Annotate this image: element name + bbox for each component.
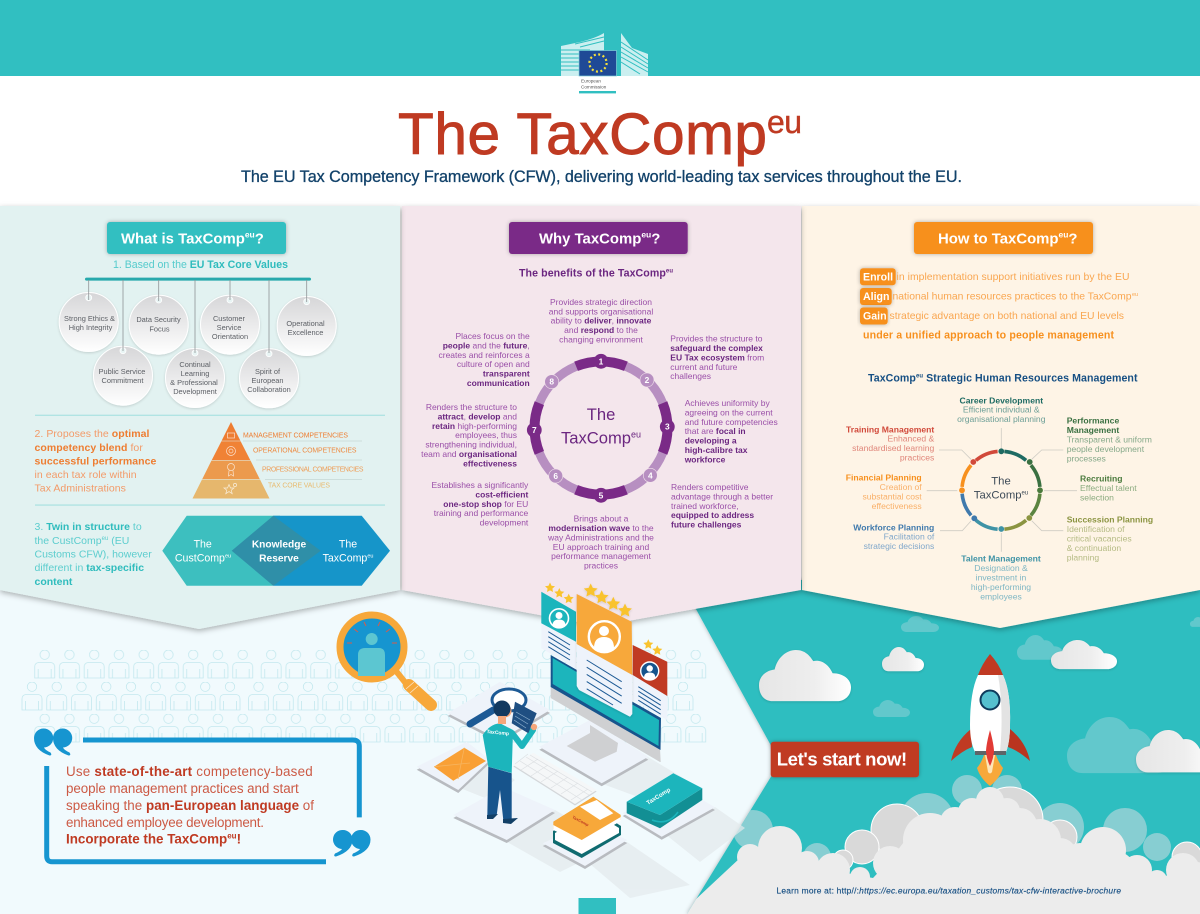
middle cloud layer <box>833 787 1200 872</box>
bottom teal tab <box>578 898 616 914</box>
benefit 4: Renders competitive <box>671 482 749 492</box>
quote text: Use state-of-the-art competency-based <box>66 764 313 779</box>
person <box>483 700 537 824</box>
benefit 8: people and the future, <box>443 340 530 350</box>
performance management: Transparent & uniform <box>1067 434 1152 444</box>
opening quotation marks <box>34 728 72 756</box>
how heading <box>914 222 1093 254</box>
HR ring centre label: TaxComp <box>974 489 1028 501</box>
competency pyramid: PROFESSIONAL COMPETENCIES <box>262 466 364 474</box>
twin structure text: (EU <box>108 535 129 547</box>
closing quotation marks <box>333 830 370 856</box>
benefits ring: 6 <box>553 471 558 481</box>
benefit 8: Places focus on the <box>456 331 530 341</box>
learn more link: Learn more at: http//:https://ec.europa.eu/taxation_customs/tax-cfw-interactive-brochure <box>776 886 1121 896</box>
core values hanging circles: Operational <box>286 319 325 328</box>
benefit 7: effectiveness <box>463 458 517 468</box>
tile: briefcase: TaxComp <box>646 787 672 807</box>
benefits ring: 4 <box>648 470 653 480</box>
enroll align gain list: national human resources practices to the TaxComp <box>892 292 1132 302</box>
enroll align gain list: Gain <box>863 310 887 322</box>
sky clouds faint <box>873 616 1200 773</box>
twin structure text: 3. Twin in structure to <box>34 521 142 533</box>
core values hanging circles: Strong Ethics & <box>64 314 115 323</box>
training management: standardised learning <box>852 443 935 453</box>
benefit 5: modernisation wave to the <box>548 523 654 533</box>
benefit 3: Achieves uniformity by <box>685 398 770 408</box>
core values hanging circles: Customer <box>213 314 246 323</box>
benefit 8: creates and reinforces a <box>438 350 530 360</box>
how heading: eu <box>1058 230 1068 240</box>
benefits ring: 5 <box>599 490 604 500</box>
benefit 1: and respond to the <box>564 325 638 335</box>
benefits ring: 2 <box>645 375 650 385</box>
benefit 4: equipped to address <box>671 510 754 520</box>
quote text: Incorporate the TaxComp <box>66 831 241 846</box>
core values hanging circles: Commitment <box>102 376 143 385</box>
what heading: ? <box>255 232 264 248</box>
panel: why <box>402 206 801 626</box>
competency blend text: 2. Proposes the optimal <box>34 428 149 440</box>
benefits heading: The benefits of the TaxComp <box>519 268 666 280</box>
card: red profile <box>633 639 667 720</box>
competency pyramid: TAX CORE VALUES <box>268 482 330 490</box>
benefit 2: current and future <box>670 362 738 372</box>
benefits ring <box>527 354 675 503</box>
enroll align gain list: eu <box>1132 292 1138 298</box>
competency pyramid: MANAGEMENT COMPETENCIES <box>243 433 348 440</box>
benefits ring centre label: eu <box>631 429 641 439</box>
back cloud layer <box>734 775 1171 861</box>
benefit 6: Establishes a significantly <box>431 480 529 490</box>
talent management: Designation & <box>974 563 1028 573</box>
benefit 6: development <box>480 518 529 528</box>
benefit 2: safeguard the complex <box>670 343 763 353</box>
twin structure text: content <box>34 576 73 588</box>
twin hexagons: CustComp <box>175 553 231 565</box>
talent management: investment in <box>976 572 1027 582</box>
performance management: Performance <box>1067 416 1119 426</box>
European Commission logo: Commission <box>581 84 607 90</box>
HR connector lines <box>927 428 1077 552</box>
benefit 1: changing environment <box>559 334 643 344</box>
benefit 1: and supports organisational <box>549 306 653 316</box>
tile: envelope <box>417 742 490 793</box>
floor shadows <box>460 757 745 898</box>
talent management: employees <box>980 591 1022 601</box>
core values hanging circles: Public Service <box>99 367 145 376</box>
main magnifying glass <box>340 615 431 705</box>
quote frame <box>47 740 359 862</box>
benefit 4: trained workforce, <box>671 501 739 511</box>
benefit 7: employees, thus <box>455 430 517 440</box>
subtitle: The EU Tax Competency Framework (CFW), delivering world-leading tax services throughout the EU. <box>241 168 962 186</box>
career development: organisational planning <box>957 414 1046 424</box>
tile: books: TaxComp <box>572 814 590 828</box>
core values hanging circles: High Integrity <box>69 323 113 332</box>
benefit 7: retain high-performing <box>432 421 517 431</box>
training management: practices <box>900 452 934 462</box>
benefits ring: 8 <box>549 377 554 387</box>
twin hexagons: Reserve <box>259 554 299 565</box>
core values hanging circles: & Professional <box>170 378 218 387</box>
benefit 5: way Administrations and the <box>547 532 654 542</box>
core values hanging circles: Focus <box>149 324 170 334</box>
HR heading: TaxComp <box>868 373 916 385</box>
core values hanging circles: Service <box>217 323 241 332</box>
twin structure text: different in tax-specific <box>34 562 144 574</box>
benefit 7: Renders the structure to <box>426 402 517 412</box>
tile: monitor base <box>539 720 648 786</box>
financial planning: substantial cost <box>862 492 922 502</box>
core values hanging circles: Spirit of <box>255 367 281 376</box>
benefits ring centre label: TaxComp <box>561 428 641 447</box>
tile: books <box>543 797 627 869</box>
benefit 4: advantage through a better <box>671 491 773 501</box>
what heading: eu <box>245 230 255 240</box>
benefit 7: strengthening individual, <box>425 440 517 450</box>
tile: person <box>453 787 555 843</box>
benefit 8: culture of open and <box>457 359 530 369</box>
benefit 4: future challenges <box>671 520 742 530</box>
title: The TaxComp <box>398 102 767 167</box>
workforce planning: Facilitation of <box>884 532 935 542</box>
enroll align gain list: strategic advantage on both national and EU levels <box>890 311 1124 322</box>
tile: magnifier <box>448 682 550 743</box>
quote text: enhanced employee development. <box>66 815 264 830</box>
person: TaxComp <box>486 729 509 737</box>
financial planning: effectiveness <box>872 501 922 511</box>
core values hanging circles <box>59 278 336 408</box>
HR ring centre label: eu <box>1022 490 1028 496</box>
benefits ring centre label: The <box>587 405 615 424</box>
card: orange profile <box>577 584 632 717</box>
what heading <box>107 222 286 254</box>
why heading: Why TaxComp <box>539 232 641 248</box>
core values hanging circles: Data Security <box>136 315 181 324</box>
competency pyramid: OPERATIONAL COMPETENCIES <box>253 448 357 454</box>
succession planning: critical vacancies <box>1067 534 1132 544</box>
career development: Efficient individual & <box>963 405 1040 415</box>
benefit 1: Provides strategic direction <box>550 297 652 307</box>
European Commission logo <box>561 33 648 93</box>
twin hexagons: eu <box>367 554 373 560</box>
performance management: people development <box>1067 444 1145 454</box>
twin hexagons: Knowledge <box>252 540 306 551</box>
enroll align gain list: Enroll <box>863 271 893 283</box>
twin hexagons: eu <box>225 554 231 560</box>
competency blend text: successful performance <box>34 456 157 468</box>
training management: Enhanced & <box>887 434 935 444</box>
recruiting: Effectual talent <box>1080 483 1137 493</box>
core values hanging circles: European <box>251 376 284 385</box>
financial planning: Creation of <box>880 482 922 492</box>
core values heading: 1. Based on the EU Tax Core Values <box>113 259 288 271</box>
core values hanging circles: Excellence <box>288 328 323 337</box>
benefit 7: attract, develop and <box>438 411 517 421</box>
twin structure text: Customs CFW), however <box>34 548 152 560</box>
benefit 8: communication <box>467 378 530 388</box>
twin hexagons: TaxComp <box>323 553 373 565</box>
tile: briefcase <box>623 773 715 840</box>
card: teal profile <box>541 582 576 668</box>
core values hanging circles: Collaboration <box>247 385 291 394</box>
enroll align gain list <box>860 268 1138 341</box>
benefit 5: performance management <box>551 551 651 561</box>
quote text: speaking the pan-European language of <box>66 798 314 813</box>
keyboard <box>513 753 597 806</box>
quote text: ! <box>237 831 241 846</box>
sky clouds white <box>759 640 1200 772</box>
twin structure text: eu <box>102 536 108 542</box>
performance management: processes <box>1067 453 1106 463</box>
benefit 3: and future competencies <box>685 417 778 427</box>
competency pyramid <box>192 422 364 498</box>
benefit 3: workforce <box>684 454 726 464</box>
teal sky panel <box>680 580 1200 914</box>
succession planning: & continuation <box>1067 543 1121 553</box>
core values hanging circles: Learning <box>181 369 209 378</box>
succession planning: Succession Planning <box>1067 515 1153 525</box>
benefit 3: high-calibre tax <box>685 445 748 455</box>
twin hexagons: The <box>339 539 357 551</box>
monitor <box>551 655 661 762</box>
pyramid tier icons <box>224 433 237 494</box>
HR ring <box>959 448 1043 532</box>
recruiting: selection <box>1080 492 1114 502</box>
why heading: ? <box>651 232 660 248</box>
enroll align gain list: in implementation support initiatives run by the EU <box>896 272 1130 283</box>
what heading: What is TaxComp <box>121 232 245 248</box>
European Commission logo: European <box>581 78 601 84</box>
benefit 2: Provides the structure to <box>670 334 763 344</box>
top teal band <box>0 0 1200 76</box>
training management: Training Management <box>846 424 934 434</box>
why heading <box>509 222 688 254</box>
panel: what <box>0 206 400 629</box>
workforce planning: Workforce Planning <box>853 522 934 532</box>
HR heading: Strategic Human Resources Management <box>923 373 1138 385</box>
enroll align gain list: under a unified approach to people management <box>863 329 1114 341</box>
benefits ring: 1 <box>599 356 604 366</box>
benefit 6: one-stop shop for EU <box>443 499 528 509</box>
competency blend text: in each tax role within <box>34 469 137 481</box>
how heading: How to TaxComp <box>938 232 1058 248</box>
benefit 2: challenges <box>670 371 711 381</box>
twin hexagons <box>162 516 390 586</box>
core values hanging circles: Development <box>173 387 217 396</box>
benefit 1: ability to deliver, innovate <box>551 316 651 326</box>
core values hanging circles: Orientation <box>212 332 248 341</box>
how heading: ? <box>1068 232 1078 248</box>
call to action button <box>771 742 919 777</box>
talent management: Talent Management <box>961 554 1041 564</box>
benefit 5: practices <box>584 561 618 571</box>
competency blend text: Tax Administrations <box>34 482 126 494</box>
call to action button: Let's start now! <box>777 749 907 770</box>
rocket <box>951 654 1030 786</box>
benefit 3: that are focal in <box>685 426 746 436</box>
quote text: people management practices and start <box>66 781 299 796</box>
recruiting: Recruiting <box>1080 474 1122 484</box>
people background rows <box>0 590 1200 914</box>
title superscript: eu <box>767 104 802 140</box>
succession planning: planning <box>1067 552 1099 562</box>
benefit 6: training and performance <box>434 508 529 518</box>
benefit 2: EU Tax ecosystem from <box>670 352 764 362</box>
benefits heading: eu <box>666 269 673 275</box>
financial planning: Financial Planning <box>846 473 922 483</box>
career development: Career Development <box>960 395 1043 405</box>
benefit 6: cost-efficient <box>475 489 528 499</box>
workforce planning: strategic decisions <box>864 541 934 551</box>
HR ring centre label: The <box>991 475 1011 487</box>
benefits ring: 3 <box>665 422 670 432</box>
competency blend text: competency blend for <box>34 442 143 454</box>
enroll align gain list: Align <box>863 291 889 303</box>
talent management: high-performing <box>971 582 1031 592</box>
benefit 3: agreeing on the current <box>685 407 773 417</box>
performance management: Management <box>1067 425 1119 435</box>
panel: how <box>802 206 1200 628</box>
HR heading: eu <box>916 374 923 380</box>
benefit 5: Brings about a <box>574 514 629 524</box>
benefit 5: EU approach training and <box>553 542 649 552</box>
benefit 7: team and organisational <box>421 449 517 459</box>
benefit 3: developing a <box>685 436 737 446</box>
twin hexagons: The <box>194 539 212 551</box>
why heading: eu <box>641 230 651 240</box>
twin structure text: the CustComp <box>34 535 129 547</box>
front cloud layer <box>680 787 1200 914</box>
succession planning: Identification of <box>1067 524 1125 534</box>
benefits ring: 7 <box>532 425 537 435</box>
core values hanging circles: Continual <box>179 360 211 369</box>
isometric illustration <box>417 582 745 898</box>
benefit 8: transparent <box>483 369 530 379</box>
quote text: eu <box>227 831 237 840</box>
